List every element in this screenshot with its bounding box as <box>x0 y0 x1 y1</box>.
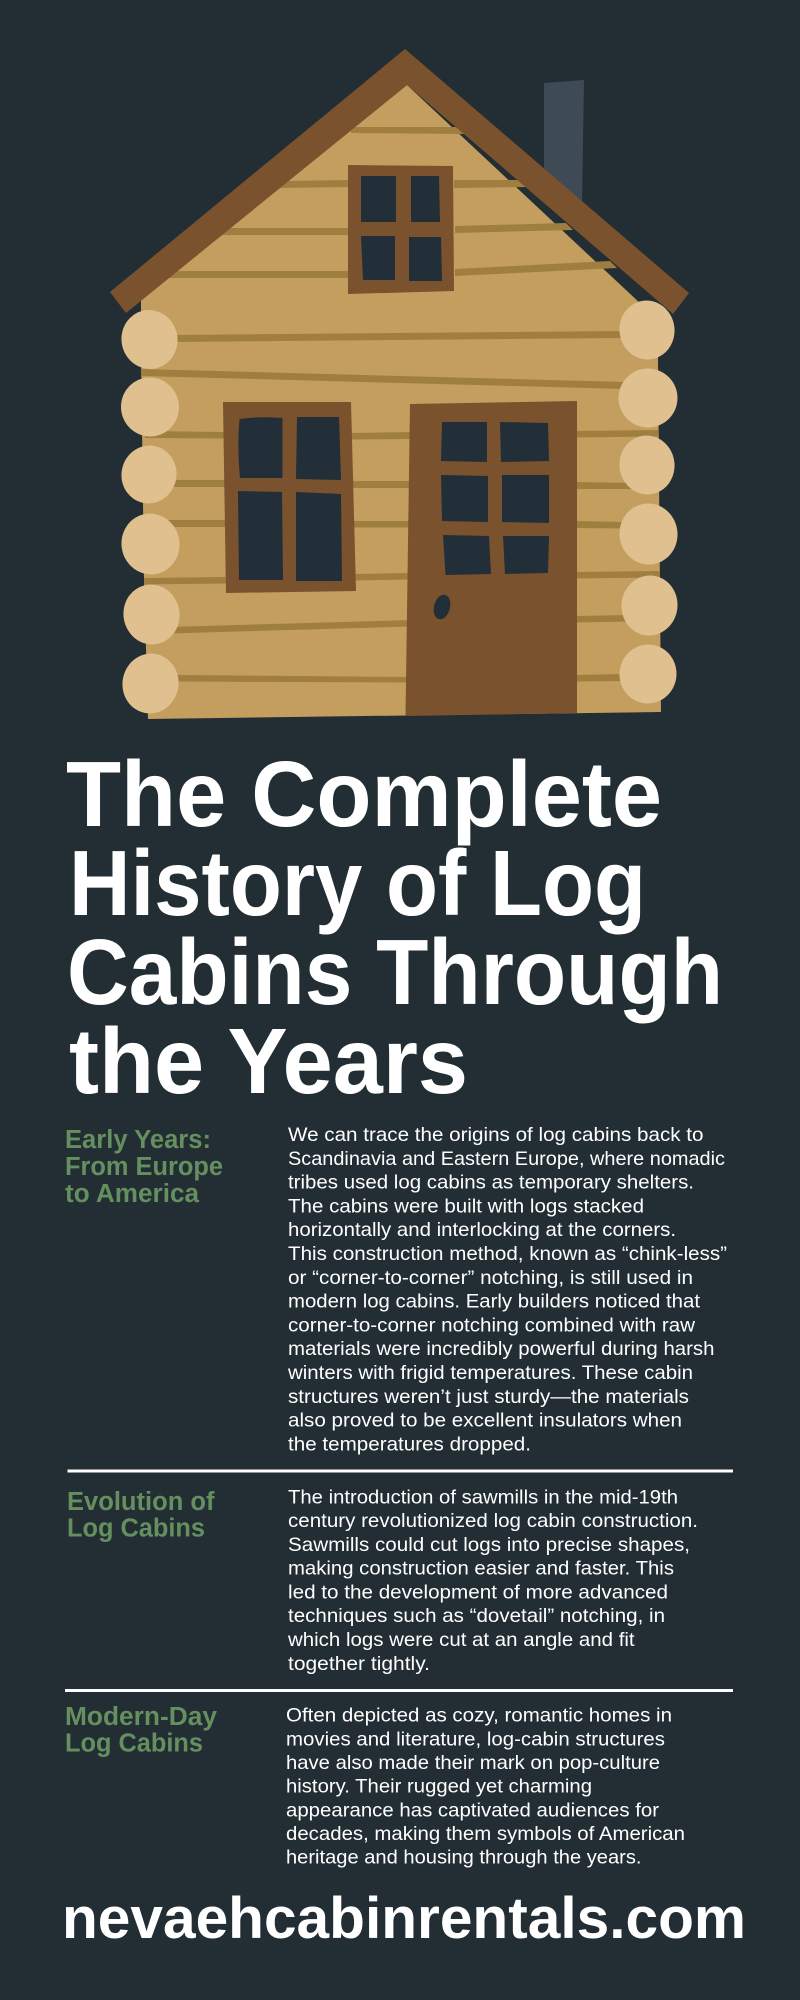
body text: evolution: The introduction of sawmills in the mid-19th <box>288 1486 678 1508</box>
cabin wall <box>141 85 661 719</box>
heading: early years: From Europe <box>65 1153 223 1181</box>
body text: modern-day: heritage and housing through the years. <box>286 1847 642 1869</box>
illustration: log cabin <box>110 49 689 719</box>
title: the Years <box>69 1009 468 1113</box>
body text: early years: horizontally and interlocking at the corners. <box>288 1219 676 1241</box>
section: modern-day <box>65 1703 685 1869</box>
title: Cabins Through <box>67 920 723 1024</box>
body text: early years: corner-to-corner notching combined with raw <box>288 1314 696 1336</box>
heading: modern-day <box>65 1703 218 1758</box>
title <box>66 742 723 1113</box>
door knob <box>431 593 453 621</box>
section: evolution <box>67 1486 698 1675</box>
heading: evolution: Log Cabins <box>67 1515 205 1543</box>
heading: early years: Early Years: <box>65 1126 211 1154</box>
body text: evolution: which logs were cut at an angle and fit <box>287 1629 635 1651</box>
wall log grooves <box>141 127 660 682</box>
body text: evolution: together tightly. <box>288 1653 430 1675</box>
body text: evolution <box>287 1486 698 1675</box>
body text: evolution: century revolutionized log cabin construction. <box>288 1510 698 1532</box>
body text: evolution: techniques such as “dovetail” notching, in <box>288 1605 665 1627</box>
body text: early years: or “corner-to-corner” notching, is still used in <box>288 1267 693 1289</box>
body text: modern-day: history. Their rugged yet charming <box>286 1776 592 1798</box>
body text: early years: the temperatures dropped. <box>288 1433 531 1455</box>
heading: modern-day: Log Cabins <box>65 1730 203 1758</box>
body text: early years <box>287 1124 727 1455</box>
body text: evolution: Sawmills could cut logs into precise shapes, <box>288 1534 690 1556</box>
body text: modern-day: have also made their mark on pop-culture <box>286 1752 660 1774</box>
body text: early years: This construction method, known as “chink-less” <box>288 1243 727 1265</box>
door <box>406 401 577 716</box>
heading: evolution: Evolution of <box>67 1488 215 1516</box>
title: The Complete <box>66 742 662 846</box>
title: History of Log <box>69 831 646 935</box>
upper window <box>348 165 454 294</box>
heading: early years: to America <box>65 1180 200 1208</box>
lower window <box>223 402 356 593</box>
body text: early years: tribes used log cabins as temporary shelters. <box>288 1172 694 1194</box>
heading: evolution <box>67 1488 215 1543</box>
section: early years <box>65 1124 727 1455</box>
body text: early years: also proved to be excellent insulators when <box>288 1410 682 1432</box>
body text: modern-day: Often depicted as cozy, romantic homes in <box>286 1705 672 1727</box>
body text: modern-day: movies and literature, log-cabin structures <box>286 1728 665 1750</box>
body text: early years: modern log cabins. Early builders noticed that <box>288 1291 701 1313</box>
corner log ends <box>116 297 681 718</box>
body text: modern-day: decades, making them symbols of American <box>286 1823 685 1845</box>
body text: early years: winters with frigid temperatures. These cabin <box>287 1362 693 1384</box>
body text: evolution: making construction easier and faster. This <box>288 1558 674 1580</box>
roof <box>110 49 689 314</box>
body text: early years: structures weren’t just sturdy—the materials <box>288 1386 689 1408</box>
body text: evolution: led to the development of more advanced <box>288 1581 668 1603</box>
body text: modern-day <box>286 1705 685 1869</box>
body text: modern-day: appearance has captivated audiences for <box>286 1799 660 1821</box>
footer: website: nevaehcabinrentals.com <box>62 1886 746 1951</box>
body text: early years: The cabins were built with logs stacked <box>288 1195 644 1217</box>
heading: modern-day: Modern-Day <box>65 1703 218 1731</box>
chimney <box>544 80 584 205</box>
heading: early years <box>65 1126 223 1208</box>
body text: early years: We can trace the origins of log cabins back to <box>288 1124 704 1146</box>
body text: early years: Scandinavia and Eastern Europe, where nomadic <box>288 1148 725 1170</box>
body text: early years: materials were incredibly powerful during harsh <box>288 1338 714 1360</box>
